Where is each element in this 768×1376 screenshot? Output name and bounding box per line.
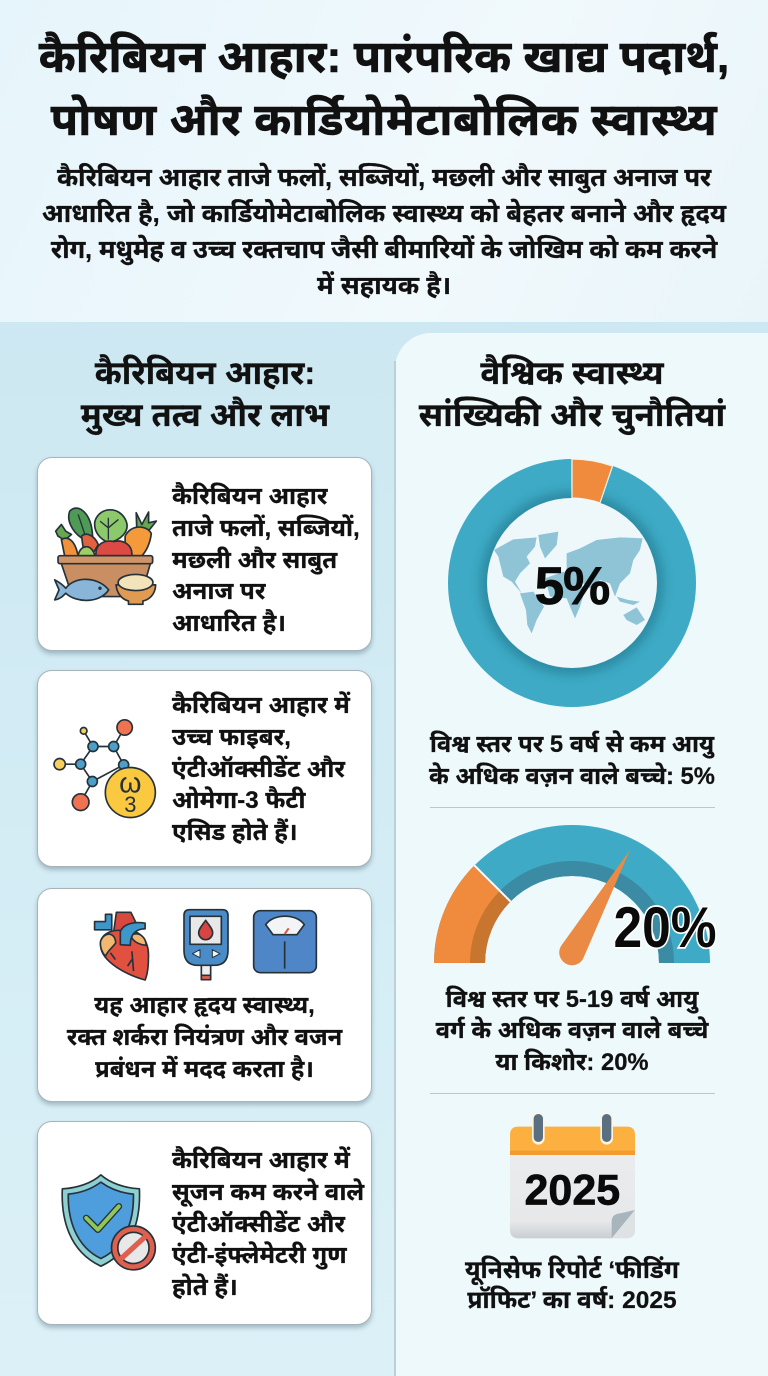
icon: glucose meter: [183, 908, 229, 980]
caption: 5-19 overweight: वर्ग के अधिक वज़न वाले बच्चे: [436, 1017, 708, 1044]
icon: omega-3 molecule: [53, 719, 156, 818]
needle: [559, 850, 630, 965]
right heading: वैश्विक स्वास्थ्य: [480, 354, 664, 391]
intro text: में सहायक है।: [317, 272, 451, 300]
card text: nutrients: उच्च फाइबर,: [172, 724, 291, 751]
card text: nutrients: एसिड होते हैं।: [172, 819, 298, 846]
card text: foods: अनाज पर: [172, 578, 266, 605]
card text: anti-inflammatory: [172, 1146, 365, 1301]
title: पोषण और कार्डियोमेटाबोलिक स्वास्थ्य: [51, 96, 717, 145]
card text: anti-inflammatory: एंटीऑक्सीडेंट और: [172, 1211, 345, 1238]
title: [38, 31, 729, 145]
card text: nutrients: कैरिबियन आहार में: [172, 692, 350, 719]
card text: nutrients: [172, 691, 350, 846]
card: foods: [37, 457, 372, 651]
intro text: आधारित है, जो कार्डियोमेटाबोलिक स्वास्थ्य को बेहतर बनाने और हृदय: [42, 200, 726, 228]
caption: 5-19 overweight: [436, 985, 709, 1076]
card text: health benefits: रक्त शर्करा नियंत्रण और वजन: [67, 1025, 342, 1051]
caption: under-5 overweight: विश्व स्तर पर 5 वर्ष से कम आयु: [430, 731, 714, 758]
panel: global health statistics: [395, 333, 768, 1376]
right heading: [418, 354, 726, 436]
intro text: रोग, मधुमेह व उच्च रक्तचाप जैसी बीमारियों के जोखिम को कम करने: [51, 236, 717, 264]
intro text: [42, 162, 727, 300]
chart: donut 5%: [448, 458, 696, 707]
card text: foods: मछली और साबुत: [172, 547, 337, 574]
world map: [494, 532, 645, 633]
card text: anti-inflammatory: एंटी-इंफ्लेमेटरी गुण: [172, 1242, 347, 1269]
caption: UNICEF report year: प्रॉफिट’ का वर्ष: 2025: [467, 1287, 677, 1314]
card text: foods: [172, 482, 360, 637]
icon: shield with prohibition sign: [61, 1174, 156, 1271]
card: anti-inflammatory: [37, 1121, 372, 1325]
card text: anti-inflammatory: कैरिबियन आहार में: [172, 1147, 350, 1174]
caption: under-5 overweight: के अधिक वज़न वाले बच्चे: 5%: [429, 762, 715, 790]
caption: 5-19 overweight: विश्व स्तर पर 5-19 वर्ष आयु: [446, 986, 698, 1012]
card text: health benefits: [66, 993, 343, 1083]
card text: foods: आधारित है।: [172, 610, 286, 637]
left heading: मुख्य तत्व और लाभ: [81, 397, 329, 433]
caption: UNICEF report year: [464, 1255, 680, 1314]
icon: omega-3 molecule: ω: [119, 768, 142, 800]
icon: weighing scale: [252, 910, 318, 974]
card text: anti-inflammatory: होते हैं।: [172, 1274, 238, 1301]
card text: nutrients: ओमेगा-3 फैटी: [172, 787, 305, 814]
left heading: [80, 354, 330, 436]
caption: 5-19 overweight: या किशोर: 20%: [495, 1048, 649, 1076]
header background: [0, 0, 768, 322]
left heading: कैरिबियन आहार:: [95, 355, 315, 391]
card text: health benefits: यह आहार हृदय स्वास्थ्य,: [94, 993, 315, 1019]
intro text: कैरिबियन आहार ताजे फलों, सब्जियों, मछली और साबुत अनाज पर: [57, 164, 711, 192]
card: nutrients: [37, 670, 372, 867]
card text: foods: कैरिबियन आहार: [172, 483, 327, 510]
icon: heart: [94, 912, 150, 981]
caption: under-5 overweight: [428, 730, 715, 790]
icon: calendar 2025: [510, 1112, 635, 1238]
card: health benefits: [37, 888, 372, 1102]
icon: calendar 2025: 2025: [524, 1167, 620, 1215]
card text: nutrients: एंटीऑक्सीडेंट और: [172, 756, 345, 783]
panel: key elements and benefits: [0, 322, 768, 1376]
title: कैरिबियन आहार: पारंपरिक खाद्य पदार्थ,: [39, 33, 729, 82]
value 20%: 20%: [613, 895, 717, 960]
chart: gauge 20%: [434, 825, 717, 966]
card text: foods: ताजे फलों, सब्जियों,: [172, 515, 360, 542]
icon: omega-3 molecule: 3: [124, 792, 136, 817]
icon: food basket: [54, 507, 158, 606]
card text: anti-inflammatory: सूजन कम करने वाले: [172, 1179, 364, 1206]
caption: UNICEF report year: यूनिसेफ रिपोर्ट ‘फीडिंग: [465, 1257, 679, 1284]
right heading: सांख्यिकी और चुनौतियां: [419, 396, 725, 433]
value 5%: 5%: [535, 557, 609, 616]
card text: health benefits: प्रबंधन में मदद करता है।: [95, 1057, 314, 1083]
